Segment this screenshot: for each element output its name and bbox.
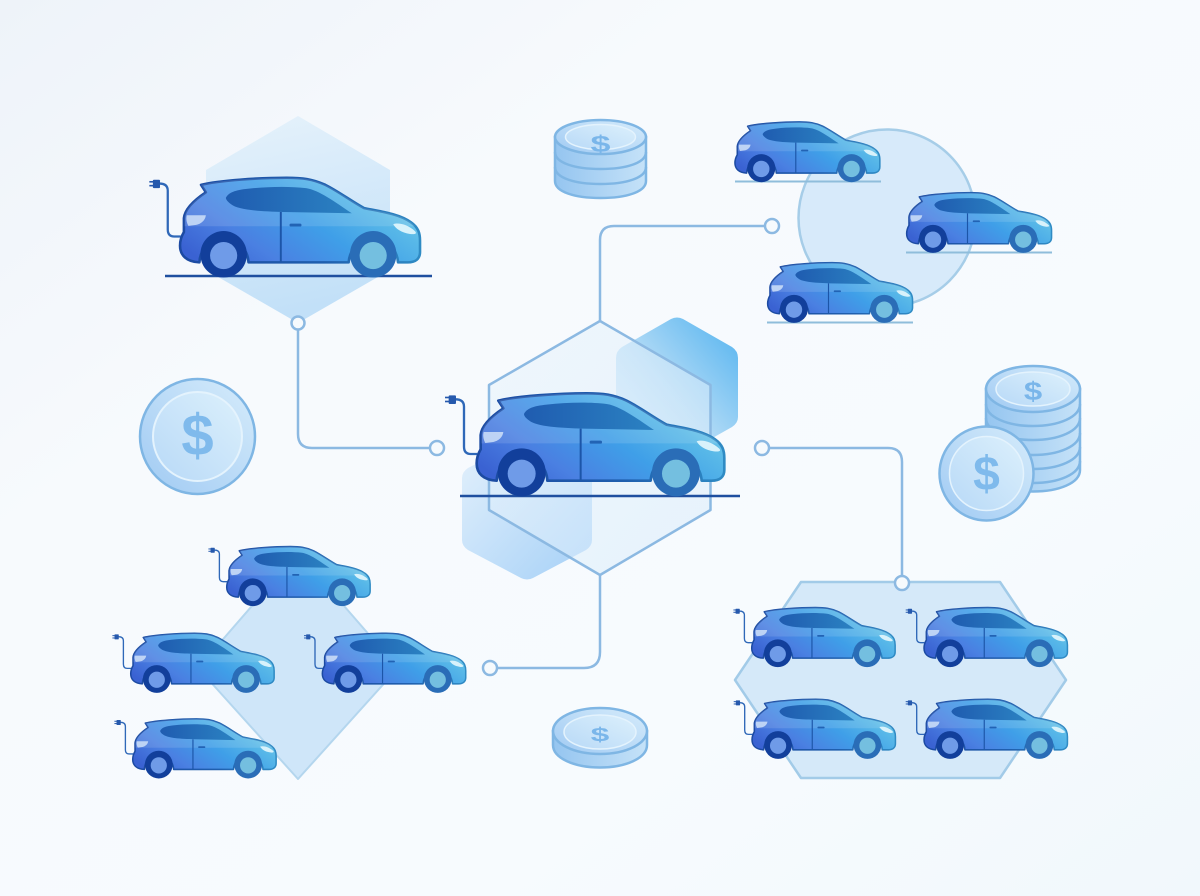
car: top-left with charger (149, 178, 432, 278)
icon: coin bottom (553, 708, 647, 768)
icon: coin stack top (555, 120, 646, 198)
fleet: bottom-right four charging cars (733, 608, 1067, 759)
front coin: $ (973, 448, 1000, 501)
front coin (940, 426, 1034, 520)
hexagon: lower-left blue (462, 438, 592, 580)
connector lines (298, 226, 902, 668)
icon: dollar coin left: $ (181, 403, 214, 468)
car: center with charger (445, 393, 740, 496)
icon: dollar coin left (140, 379, 255, 494)
hexagon: bottom-right fleet backdrop (735, 582, 1066, 778)
hexagon cluster: central backdrop (462, 318, 738, 580)
fleet: bottom-left four charging cars (112, 547, 466, 778)
stack (986, 366, 1080, 492)
icon: coin bottom: $ (591, 723, 609, 745)
circle: top-right fleet backdrop (798, 130, 976, 306)
fleet: top-right three cars (735, 122, 1052, 323)
icon: coin stack right with front coin (940, 366, 1080, 520)
icon: coin stack top: $ (590, 132, 611, 157)
hexagon: outlined center (489, 321, 710, 575)
hexagon: upper-right blue (616, 318, 738, 458)
stack: $ (1024, 378, 1042, 406)
connector nodes (292, 219, 909, 675)
hexagon: top-left car backdrop (206, 116, 390, 323)
diamond: bottom-left fleet backdrop (198, 553, 398, 779)
